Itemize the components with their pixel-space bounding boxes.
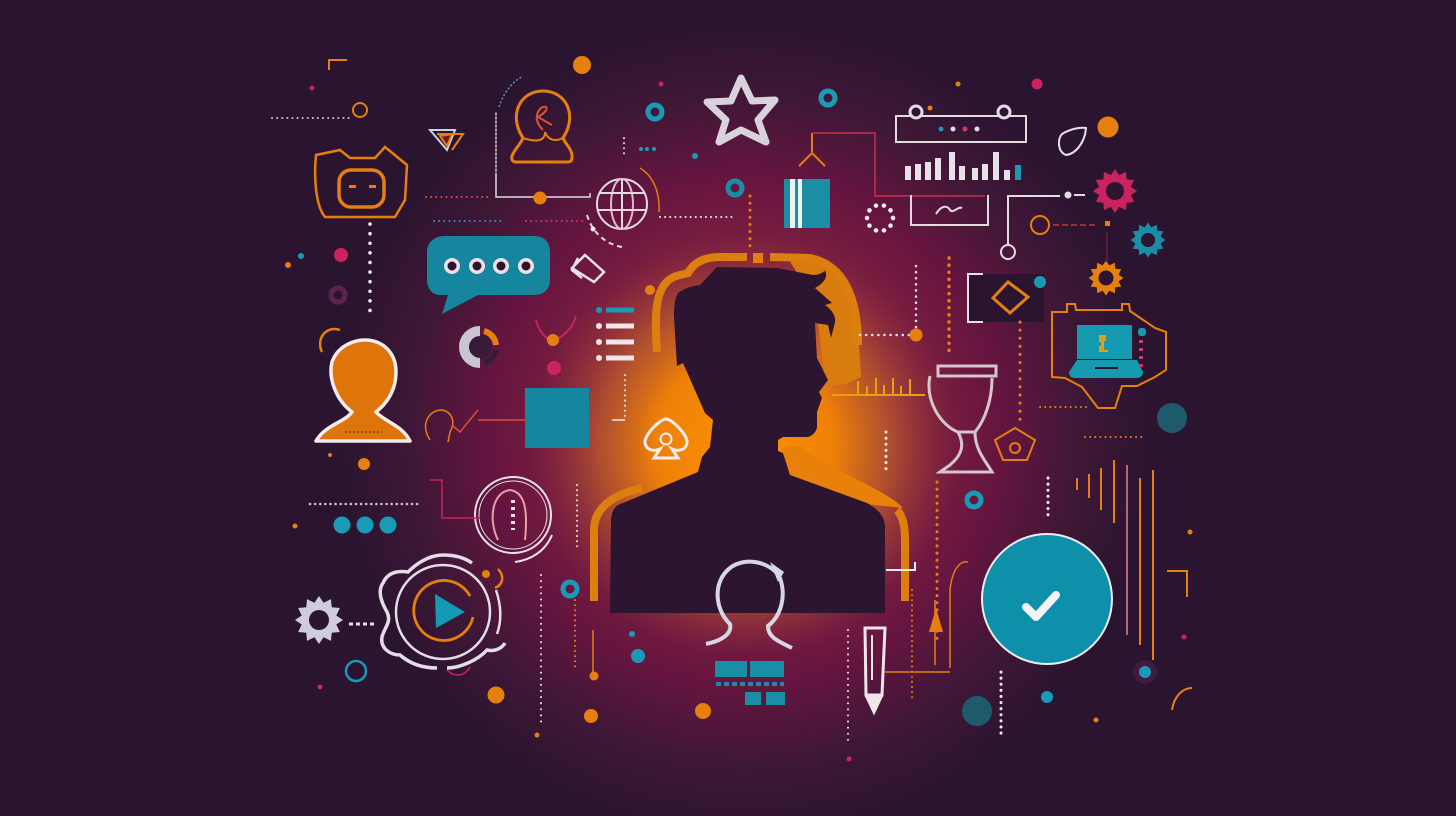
icon: laptop circuit [1052,304,1166,408]
icon: large check badge [982,534,1112,664]
connector lines top centre [812,133,985,196]
scattered dots: teal [298,147,1053,703]
icon: star [707,78,775,142]
central silhouette figure [594,253,905,613]
icon: circular head [430,477,552,562]
thin connectors [496,76,968,676]
panel: diamond card [968,274,1046,322]
icon: leaf [1059,128,1086,155]
scattered dots: magenta [310,78,1186,762]
headphone arch outline [656,257,858,352]
icon: tilted tag [572,255,604,282]
icon: pencil [865,628,885,712]
arrow marker [929,608,943,632]
shoulder outline [594,488,905,601]
teal dots [334,516,396,534]
mini line chart beside head [832,378,925,395]
icon: speech bubble [427,236,550,314]
ring markers [331,91,1187,726]
icon: checklist lines [596,307,634,361]
connector: circuit right top [1001,192,1110,262]
vertical lines right [329,60,1192,710]
orange halo fill [790,258,861,386]
teal square [525,388,589,448]
icon: magenta gear [1093,169,1137,213]
scattered dots: orange [285,56,1192,738]
icon: robot face [315,147,407,217]
icon: donut chart [464,331,496,363]
panel: bar chart [896,106,1026,180]
icon: video play [380,555,505,675]
icon: orange gear [1088,260,1124,296]
icon: white gear [295,596,374,644]
icon: pentagon badge [995,428,1035,460]
icon: orange user [316,329,410,441]
icon: teal gear [1130,222,1166,258]
icon: hooded user outline [512,91,572,162]
panel: signature box [911,195,988,225]
icon: trophy cup [929,366,996,472]
icon: pin node [536,316,576,375]
icon: shopping bag [784,133,830,228]
icon: small headset person [706,562,792,705]
background glow [335,20,1155,816]
dotted connectors [272,113,1145,740]
icon: head with check [426,410,525,442]
silhouette [610,267,885,613]
icon: triangle logo [430,130,463,150]
icon: cloud person [645,419,687,458]
icon: globe [587,168,659,247]
